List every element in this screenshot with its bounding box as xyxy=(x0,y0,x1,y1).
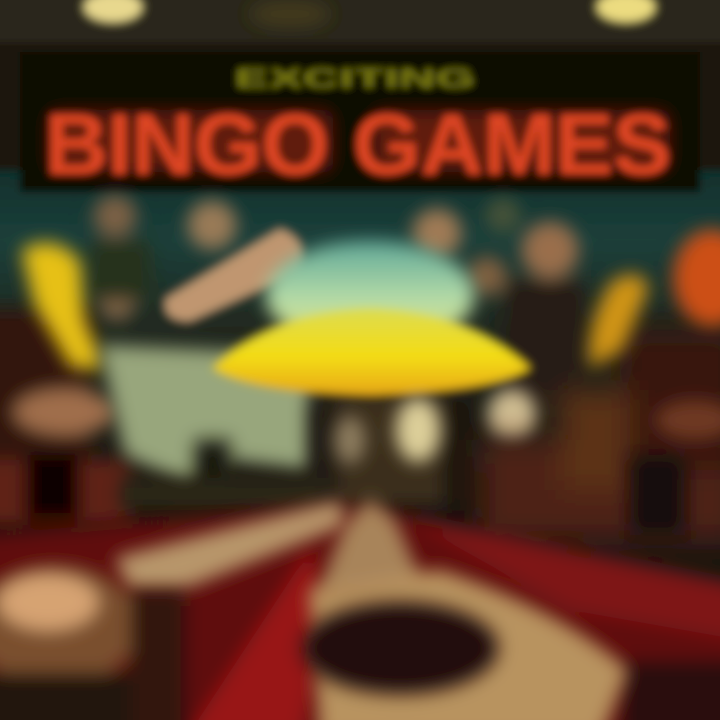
raised arm xyxy=(164,228,303,322)
central yellow umbrella xyxy=(212,308,532,396)
dark table legs xyxy=(120,395,475,510)
cream walkway xyxy=(115,500,345,590)
lamp glow spots xyxy=(335,389,536,464)
icon: left ceiling light xyxy=(83,0,143,23)
icon: left yellow lamp xyxy=(22,243,105,368)
sign subtitle: EXCITING xyxy=(235,63,475,93)
red carpet floor xyxy=(0,505,720,720)
sign title: BINGO GAMES xyxy=(45,97,671,193)
left round table xyxy=(0,565,185,720)
sign panel xyxy=(20,52,700,193)
left figure xyxy=(0,310,130,525)
pale green table xyxy=(100,345,310,485)
sign title glow xyxy=(48,110,670,172)
central pedestal xyxy=(315,498,425,600)
crowd heads xyxy=(90,195,585,410)
ceiling band with lights xyxy=(0,0,720,42)
central lamp dome xyxy=(266,241,474,349)
right figures xyxy=(480,330,720,540)
bottom oval ring xyxy=(302,570,628,720)
icon: right yellow lamp xyxy=(589,275,648,368)
icon: right ceiling light xyxy=(596,0,656,23)
icon: right orange lamp xyxy=(674,230,720,326)
right figure shadow xyxy=(630,400,720,535)
